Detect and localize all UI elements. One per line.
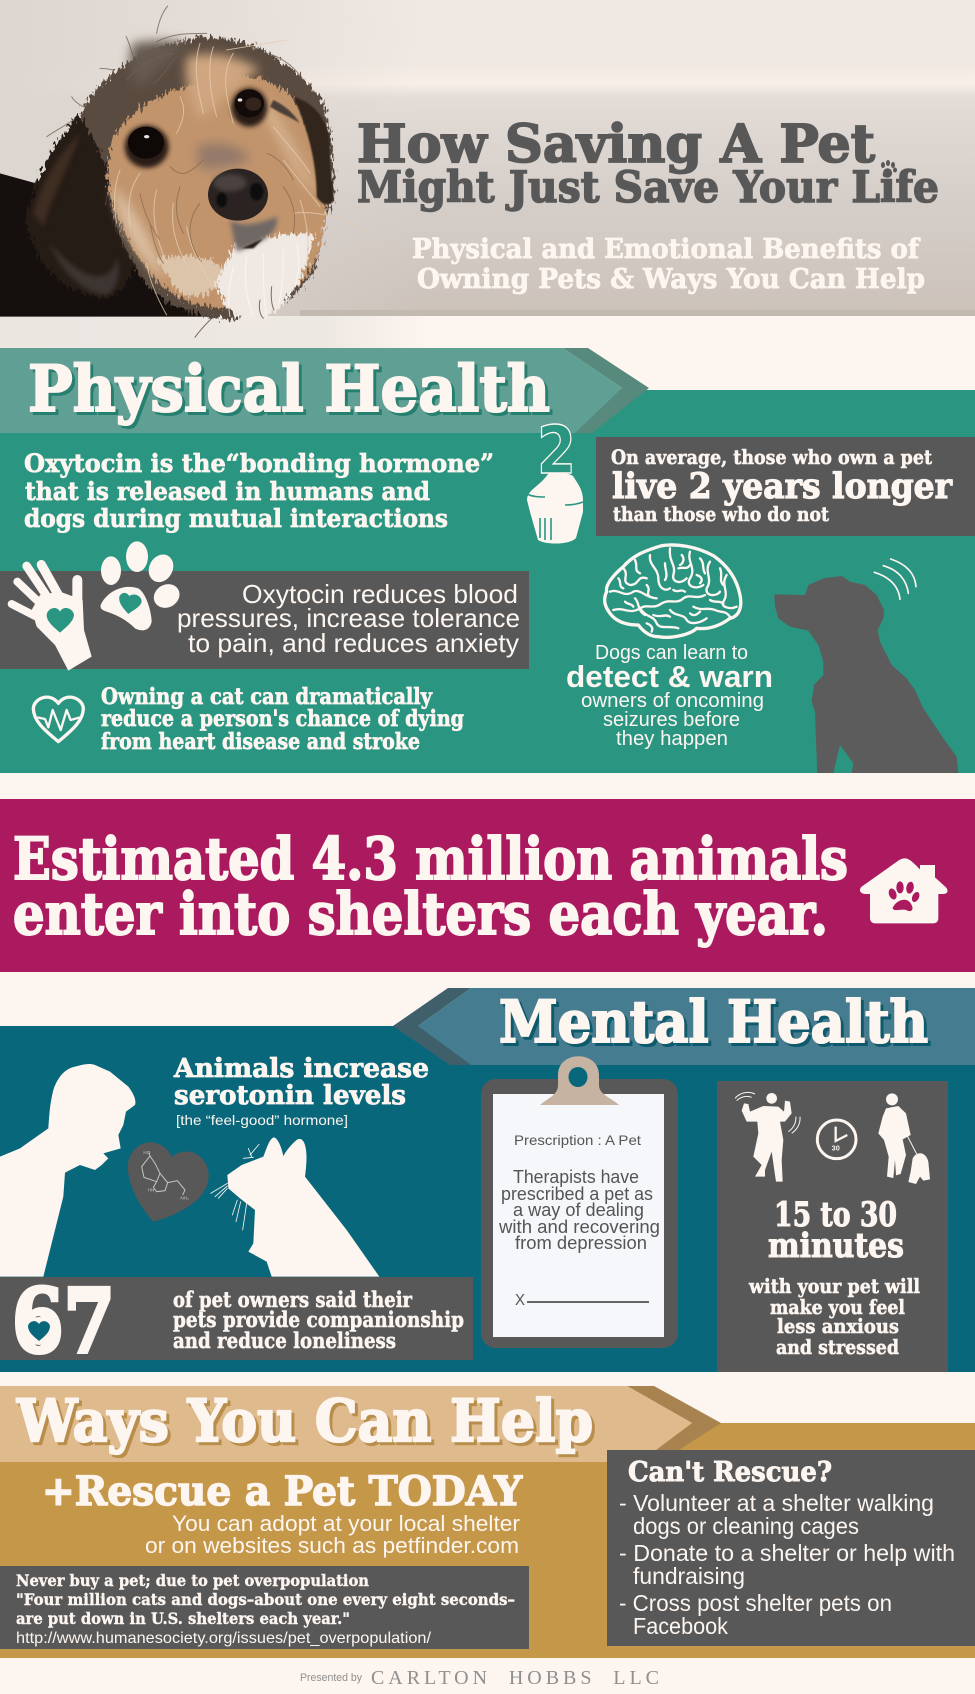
text block: serotonin — [173, 1054, 429, 1128]
panel background — [0, 1423, 975, 1658]
arrow banner — [393, 988, 975, 1065]
callout: 67 statistic: and reduce loneliness — [173, 1328, 396, 1353]
callout: oxytocin reduces: Oxytocin reduces blood — [242, 579, 518, 609]
prescription text: prescribed a pet as — [501, 1184, 653, 1204]
text block: bonding hormone: Oxytocin is the“bonding hormone” — [24, 449, 494, 478]
statistic text: enter into shelters each year. — [13, 880, 828, 948]
icon: heartbeat — [33, 697, 83, 742]
callout: 67 statistic: pets provide companionship — [173, 1307, 464, 1332]
prescription text: a way of dealing — [513, 1200, 644, 1220]
callout: never buy a pet: http://www.humanesociety.org/issues/pet_overpopulation/ — [16, 1630, 432, 1647]
panel: mental health — [0, 988, 975, 1373]
callout: 15 to 30 minutes — [717, 1081, 948, 1372]
prescription text: Therapists have — [513, 1167, 639, 1187]
right eye — [231, 88, 267, 127]
illustration: man silhouette — [0, 1064, 135, 1277]
text block: rescue a pet: or on websites such as petfinder.com — [145, 1533, 519, 1558]
callout: can't rescue: Can't Rescue? — [628, 1457, 832, 1488]
subtitle: Physical and Emotional Benefits of — [412, 234, 921, 265]
fur strokes — [47, 6, 367, 337]
footer credit: Presented by — [300, 1672, 362, 1684]
text block: detect and warn: Dogs can learn to — [595, 642, 748, 664]
callout: can't rescue: - Volunteer at a shelter walking — [619, 1490, 934, 1516]
panel: ways you can help — [0, 1386, 975, 1658]
illustration: cat silhouette — [211, 1137, 379, 1277]
prescription text — [498, 1132, 660, 1309]
text block: detect and warn: they happen — [616, 728, 728, 750]
text block: owning a cat: reduce a person's chance of dying — [101, 706, 464, 732]
panel: physical health — [0, 348, 975, 773]
subtitle — [412, 234, 925, 295]
callout: oxytocin reduces: pressures, increase tolerance — [177, 603, 520, 633]
prescription text: Prescription : A Pet — [514, 1132, 641, 1148]
callout: never buy a pet: are put down in U.S. shelters each year." — [16, 1609, 350, 1628]
arrow banner — [0, 1386, 721, 1462]
heart with serotonin molecule: HN — [148, 1188, 154, 1193]
minutes text: less anxious — [777, 1314, 899, 1338]
text block: serotonin: [the “feel-good” hormone] — [176, 1112, 348, 1128]
clipboard: prescription — [481, 1056, 678, 1348]
text block: rescue a pet: +Rescue a Pet TODAY — [42, 1468, 522, 1515]
callout: never buy a pet: "Four million cats and dogs–about one every eight seconds– — [16, 1590, 515, 1609]
callout: never buy a pet — [0, 1566, 529, 1649]
panel background — [0, 1026, 975, 1372]
callout: never buy a pet: Never buy a pet; due to pet overpopulation — [16, 1571, 369, 1590]
minutes text — [748, 1195, 920, 1359]
text block: serotonin: serotonin levels — [174, 1081, 406, 1111]
text block: owning a cat — [101, 684, 464, 755]
callout: can't rescue: dogs or cleaning cages — [633, 1513, 859, 1539]
heart with serotonin molecule — [128, 1142, 209, 1222]
statistic text: Estimated 4.3 million animals — [13, 825, 848, 893]
title: How Saving A Pet — [357, 114, 875, 175]
heading: mental health: Mental Health — [499, 988, 928, 1056]
arrow banner — [0, 348, 649, 433]
panel: shelter statistic — [0, 799, 975, 972]
title — [357, 114, 939, 213]
text block: detect and warn: seizures before — [603, 709, 740, 731]
text block: bonding hormone — [24, 449, 494, 533]
icon: dancing person — [735, 1092, 800, 1182]
callout: live 2 years longer — [596, 437, 975, 536]
callout: can't rescue — [607, 1450, 975, 1646]
heart with serotonin molecule: HO — [143, 1150, 151, 1155]
callout: can't rescue: - Cross post shelter pets on — [619, 1590, 892, 1616]
clipboard clip — [540, 1056, 619, 1105]
number 67: 67 — [12, 1269, 115, 1373]
icon: clock 30: 30 — [832, 1143, 840, 1152]
text block: serotonin: Animals increase — [173, 1054, 429, 1084]
text block: rescue a pet — [42, 1468, 522, 1558]
text block: owning a cat: Owning a cat can dramatically — [101, 684, 433, 710]
callout: live 2 years longer: than those who do not — [613, 502, 830, 526]
panel background — [0, 390, 975, 773]
callout: can't rescue: fundraising — [633, 1563, 745, 1589]
prescription text: from depression — [515, 1233, 647, 1253]
minutes text: 15 to 30 — [774, 1195, 897, 1235]
dog head fur — [80, 37, 334, 320]
left eye — [125, 125, 169, 168]
icon: person walking dog — [878, 1093, 930, 1184]
dog beard — [157, 233, 313, 325]
header wall background — [0, 0, 975, 348]
header panel with dog photo — [0, 0, 975, 348]
icon: hand with heart — [12, 565, 92, 671]
icon: brain — [605, 545, 741, 637]
heart with serotonin molecule: NH₂ — [180, 1195, 189, 1200]
text block: detect and warn: detect & warn — [566, 659, 773, 694]
prescription text: with and recovering — [498, 1217, 660, 1237]
statistic text — [13, 825, 848, 948]
dog portrait illustration — [0, 6, 367, 337]
icon: cupcake with number 2 candle — [527, 412, 583, 544]
prescription text: X — [515, 1292, 525, 1309]
callout: can't rescue: - Donate to a shelter or help with — [619, 1540, 955, 1566]
icon: clock 30 — [817, 1120, 856, 1159]
minutes text: make you feel — [770, 1295, 905, 1319]
minutes text: and stressed — [776, 1335, 899, 1359]
text block: owning a cat: from heart disease and stroke — [101, 729, 420, 755]
icon: dog silhouette with sound waves — [774, 559, 958, 773]
band background — [0, 799, 975, 972]
subtitle: Owning Pets & Ways You Can Help — [417, 264, 925, 295]
text block: rescue a pet: You can adopt at your local shelter — [172, 1511, 520, 1536]
icon: cupcake with number 2 candle: 2 — [537, 412, 576, 489]
icon: small paw in title — [881, 160, 897, 177]
text block: detect and warn — [566, 642, 773, 750]
callout: live 2 years longer: live 2 years longer — [612, 466, 953, 507]
text block: bonding hormone: dogs during mutual interactions — [24, 504, 448, 533]
heading: ways you can help: Ways You Can Help — [16, 1387, 593, 1455]
nose — [208, 169, 268, 221]
icon: house with paw — [860, 858, 948, 923]
text block: bonding hormone: that is released in humans and — [25, 477, 430, 506]
minutes text: with your pet will — [748, 1274, 920, 1298]
callout: oxytocin reduces: to pain, and reduces anxiety — [188, 628, 519, 658]
title: Might Just Save Your Life — [357, 163, 939, 213]
callout: live 2 years longer: On average, those who own a pet — [611, 445, 933, 469]
callout: 67 statistic — [0, 1269, 473, 1373]
footer credit: CARLTON HOBBS LLC — [371, 1667, 659, 1689]
callout: 67 statistic: of pet owners said their — [173, 1287, 413, 1312]
heading: physical health: Physical Health — [28, 352, 550, 427]
callout: can't rescue: Facebook — [633, 1613, 728, 1639]
minutes text: minutes — [768, 1226, 904, 1266]
text block: detect and warn: owners of oncoming — [581, 690, 764, 712]
callout: oxytocin reduces — [0, 571, 529, 669]
icon: paw with heart — [101, 541, 184, 630]
